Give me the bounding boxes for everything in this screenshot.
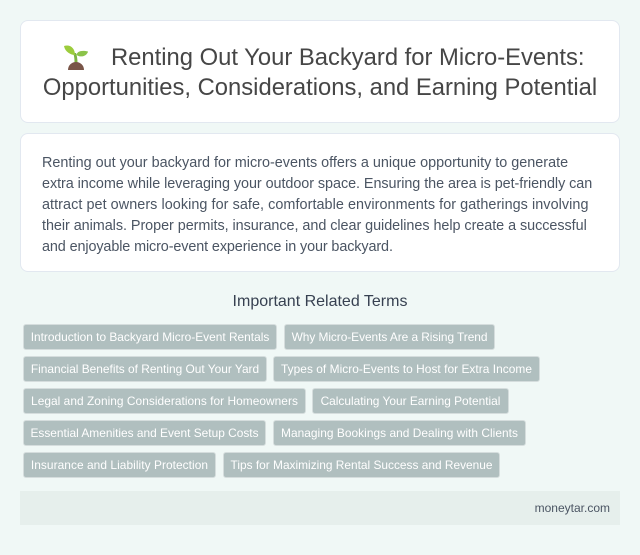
panel: intro [20,133,620,272]
intro text: Renting out your backyard for micro-events offers a unique opportunity to generate [42,155,568,171]
tag [23,324,277,350]
tag: Insurance and Liability Protection [31,458,208,472]
tag [223,452,500,478]
tag: Why Micro-Events Are a Rising Trend [292,330,487,344]
tag [273,356,540,382]
intro text: their animals. Proper permits, insurance, and clear guidelines help create a successful [42,218,587,234]
tag [23,388,306,414]
tag: Legal and Zoning Considerations for Homeowners [31,394,298,408]
tag [23,420,266,446]
tag: Types of Micro-Events to Host for Extra Income [281,362,532,376]
tag [312,388,509,414]
tag: Financial Benefits of Renting Out Your Yard [31,362,259,376]
intro text [42,155,592,255]
tags [23,324,540,478]
tag: Managing Bookings and Dealing with Clients [281,426,518,440]
tag [23,356,267,382]
footer [20,491,620,525]
tag [284,324,495,350]
title line 2: Opportunities, Considerations, and Earning Potential [43,74,597,101]
heading: related terms: Important Related Terms [233,293,407,310]
tag [273,420,526,446]
icon: seedling [64,46,88,70]
panel: title card [20,20,620,123]
tag [23,452,216,478]
intro text: and enjoyable micro-event experience in your backyard. [42,239,393,255]
footer: moneytar.com [535,501,610,515]
tag: Essential Amenities and Event Setup Costs [30,426,259,440]
tag: Tips for Maximizing Rental Success and Revenue [231,458,492,472]
intro text: attract pet owners looking for safe, comfortable environments for gatherings involving [42,197,589,213]
intro text: extra income while leveraging your outdoor space. Ensuring the area is pet-friendly can [42,176,592,192]
tag: Calculating Your Earning Potential [321,394,500,408]
title: Renting Out Your Backyard for Micro-Events: [111,44,585,71]
tag: Introduction to Backyard Micro-Event Rentals [31,330,269,344]
